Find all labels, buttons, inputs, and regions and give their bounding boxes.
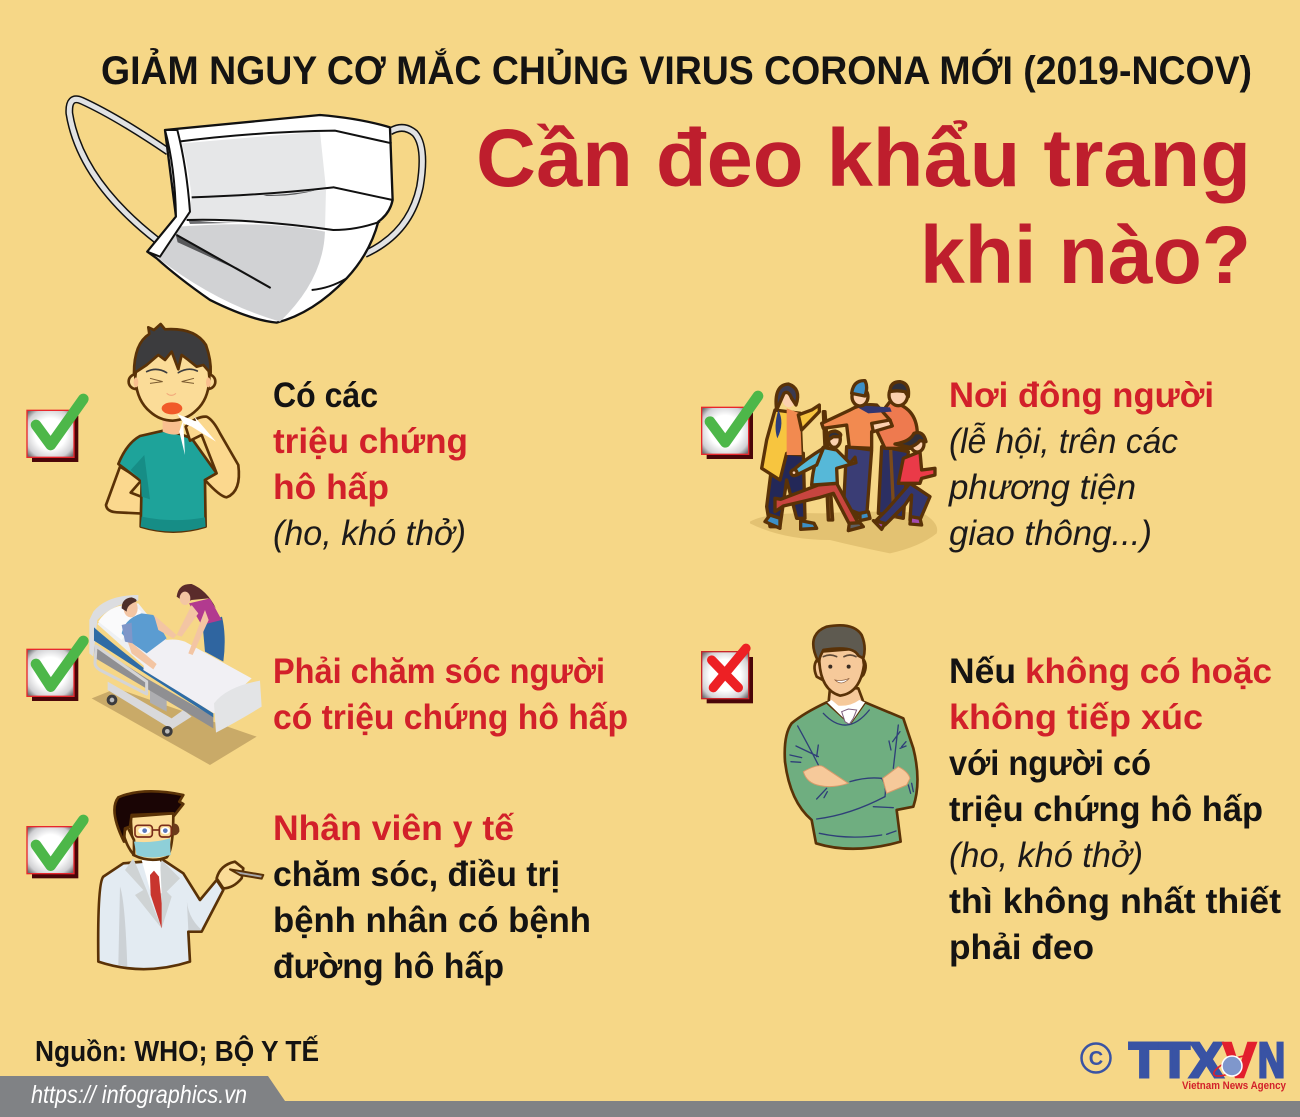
text: medical staff: đường hô hấp — [273, 947, 504, 986]
text: not necessary: thì không nhất thiết — [949, 882, 1281, 921]
text: respiratory symptoms: Có các — [273, 376, 378, 415]
logo: TTXVN: TTX — [1129, 1034, 1223, 1088]
icon: man with crossed arms — [785, 625, 917, 849]
icon: check box — [702, 396, 758, 459]
text: respiratory symptoms: (ho, khó thở) — [273, 514, 466, 553]
logo: TTXVN: Vietnam News Agency — [1182, 1080, 1287, 1092]
logo: TTXVN: N — [1258, 1034, 1285, 1088]
panel: medical staff — [27, 791, 591, 986]
logo: TTXVN: V — [1223, 1034, 1256, 1088]
text: caring for patients — [273, 652, 628, 737]
copyright symbol — [1082, 1044, 1110, 1072]
panel: not necessary — [702, 625, 1281, 967]
text: medical staff: chăm sóc, điều trị — [273, 855, 560, 894]
text: caring for patients: Phải chăm sóc người — [273, 652, 605, 691]
text: not necessary — [949, 652, 1281, 967]
icon: surgical mask — [69, 99, 422, 323]
icon: check box — [27, 820, 83, 878]
text: not necessary: triệu chứng hô hấp — [949, 790, 1263, 829]
copyright symbol: C — [1089, 1048, 1103, 1070]
icon: doctor with face mask — [98, 791, 263, 969]
text: crowded places: giao thông...) — [949, 514, 1152, 553]
footer band — [0, 1076, 1300, 1117]
source note: Nguồn: WHO; BỘ Y TẾ — [35, 1034, 319, 1068]
panel: crowded places — [702, 376, 1214, 553]
text: crowded places: (lễ hội, trên các — [949, 422, 1178, 461]
heading: subtitle: GIẢM NGUY CƠ MẮC CHỦNG VIRUS CORONA MỚI (2019-NCOV) — [101, 47, 1252, 93]
heading: main title: Cần đeo khẩu trang — [476, 113, 1251, 204]
text: medical staff — [273, 809, 591, 986]
text: crowded places: phương tiện — [948, 468, 1136, 507]
logo: TTXVN — [1129, 1034, 1287, 1092]
heading: main title — [476, 113, 1251, 301]
footer url: https:// infographics.vn — [31, 1081, 247, 1109]
icon: patient in hospital bed — [89, 584, 262, 765]
text: not necessary: với người có — [949, 744, 1151, 783]
icon: coughing boy — [106, 324, 239, 532]
text: not necessary: phải đeo — [949, 928, 1094, 967]
text: crowded places — [948, 376, 1214, 553]
icon: cross box — [702, 648, 753, 703]
text: not necessary: (ho, khó thở) — [949, 836, 1143, 875]
icon: crowd of people — [750, 381, 937, 553]
text: caring for patients: có triệu chứng hô hấp — [273, 698, 628, 737]
text: respiratory symptoms: triệu chứng — [273, 422, 468, 461]
icon: check box — [27, 641, 83, 701]
icon: check box — [27, 399, 83, 462]
text: medical staff: bệnh nhân có bệnh — [273, 901, 591, 940]
panel: respiratory symptoms — [27, 324, 468, 553]
text: not necessary: không tiếp xúc — [949, 698, 1203, 737]
panel: caring for patients — [27, 584, 628, 765]
heading: main title: khi nào? — [920, 210, 1251, 301]
text: crowded places: Nơi đông người — [949, 376, 1214, 415]
text: respiratory symptoms — [273, 376, 468, 553]
text: not necessary: Nếu — [949, 652, 1016, 691]
text: not necessary: không có hoặc — [1025, 652, 1272, 691]
text: medical staff: Nhân viên y tế — [273, 809, 515, 848]
text: respiratory symptoms: hô hấp — [273, 468, 389, 507]
